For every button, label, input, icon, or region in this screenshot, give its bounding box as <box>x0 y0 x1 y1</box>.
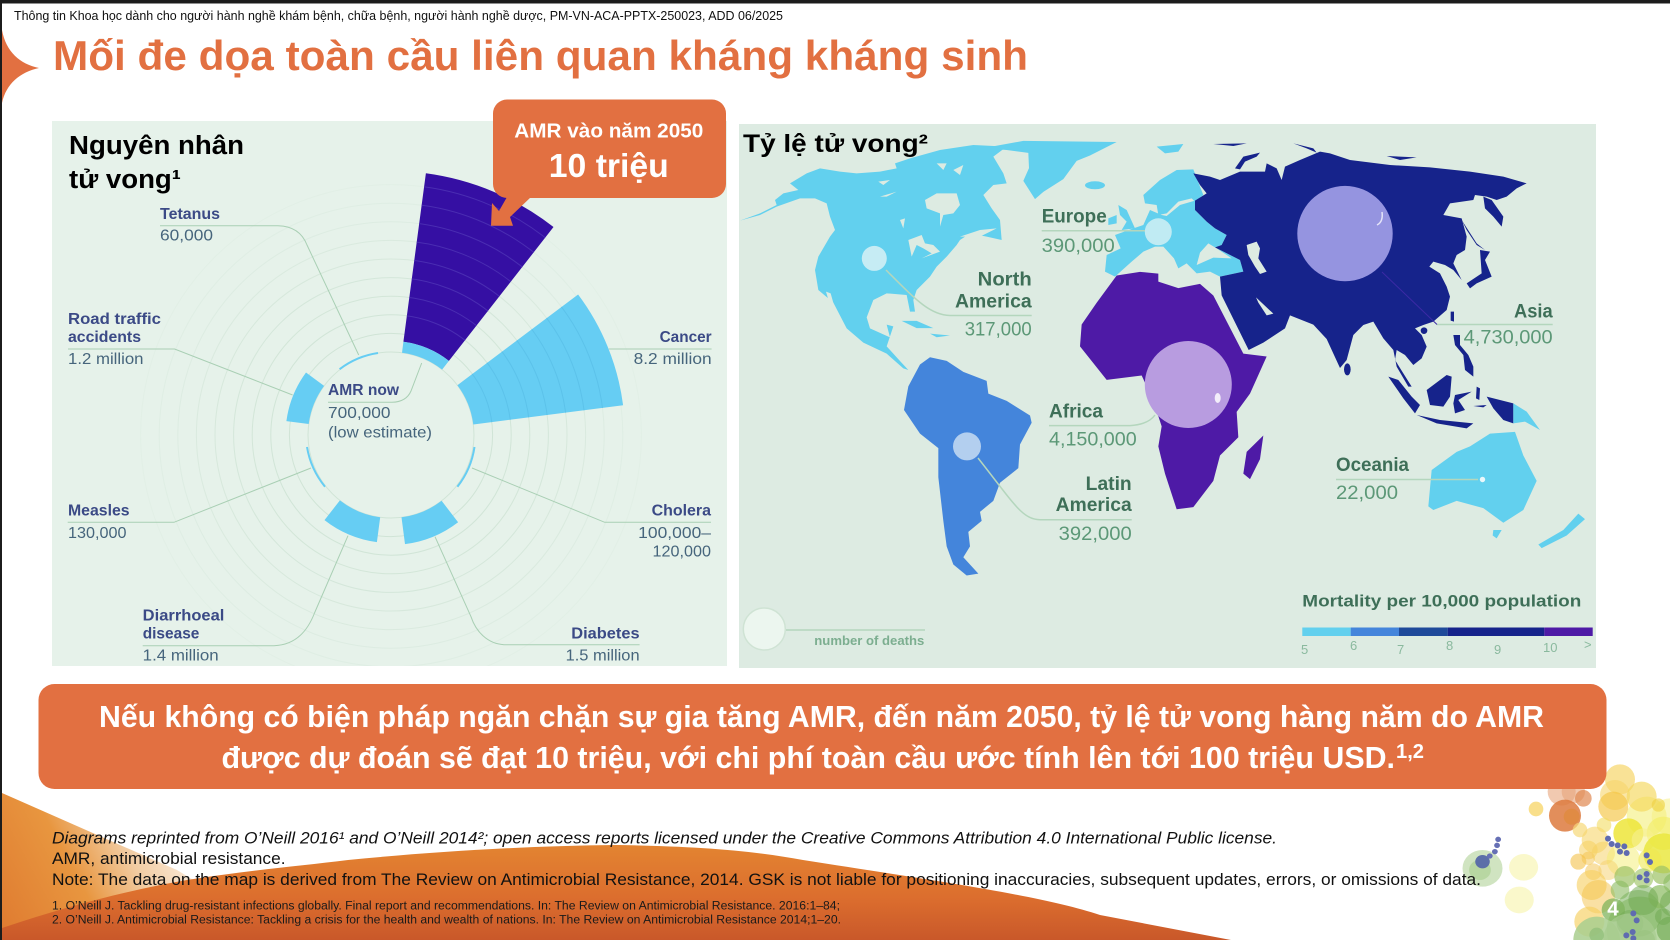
label: Road traffic accidents: 1.2 million <box>68 351 144 368</box>
label: Diarrhoeal disease: Diarrhoeal <box>143 608 224 625</box>
rings over cancer sector <box>472 306 603 422</box>
label: AMR now: AMR now <box>328 382 400 399</box>
sector: AMR now <box>402 342 449 370</box>
label: Europe <box>1042 207 1115 257</box>
label: Asia: 4,730,000 <box>1464 328 1553 348</box>
label: Cancer <box>634 329 712 368</box>
footnotes <box>52 829 1481 889</box>
legend: mortality scale: 9 <box>1494 642 1501 657</box>
panel: world mortality map <box>739 124 1596 668</box>
icon: title arrow <box>2 30 39 103</box>
panel: causes of death <box>52 121 727 685</box>
label: Road traffic accidents: Road traffic <box>68 311 161 328</box>
sector: AMR 2050 <box>403 173 554 361</box>
label: Africa: Africa <box>1049 401 1103 422</box>
legend: mortality scale: 10 <box>1543 640 1557 655</box>
leader lines <box>786 231 1553 630</box>
label: Cholera: Cholera <box>652 503 711 520</box>
label: Asia: Asia <box>1514 301 1553 322</box>
label: Cholera <box>638 503 711 561</box>
title: Mối đe dọa toàn cầu liên quan kháng kháng sinh <box>53 32 1028 79</box>
header note: Thông tin Khoa học dành cho người hành nghề khám bệnh, chữa bệnh, người hành nghề dược, PM-VN-ACA-PPTX-250023, ADD 06/2025 <box>14 9 783 23</box>
banner: key message: 1,2 <box>1396 741 1424 763</box>
legend: mortality scale: 8 <box>1446 638 1453 653</box>
callout: AMR in 2050: 10 triệu <box>549 147 669 184</box>
legend: mortality scale: > <box>1584 637 1592 652</box>
footnotes: Note: The data on the map is derived from The Review on Antimicrobial Resistance, 2014. GSK is not liable for positioning inaccuracies, subsequent updates, errors, or omissions of data. <box>52 871 1481 889</box>
legend: mortality scale: 6 <box>1350 638 1357 653</box>
heading: causes: tử vong¹ <box>69 166 181 194</box>
label: Latin America: 392,000 <box>1059 524 1132 545</box>
banner: key message <box>38 684 1606 789</box>
sector: cancer <box>457 294 623 424</box>
decorative bubbles: left group <box>1463 837 1538 913</box>
label: North America <box>955 270 1032 340</box>
banner: key message: được dự đoán sẽ đạt 10 triệu, với chi phí toàn cầu ước tính lên tới 100 triệu USD. <box>222 740 1395 775</box>
sector: cholera <box>457 447 474 487</box>
sector: road traffic <box>286 372 324 424</box>
references <box>52 900 841 926</box>
legend: number of deaths <box>743 608 924 650</box>
decorative bubbles: right cluster <box>1529 764 1670 940</box>
bubble: Europe <box>1145 218 1172 245</box>
label: North America: 317,000 <box>965 320 1032 340</box>
footnotes: AMR, antimicrobial resistance. <box>52 850 286 868</box>
label: Measles <box>68 503 130 542</box>
label: Latin America: Latin <box>1086 474 1132 495</box>
map: Latin America, Greenland and Africa <box>902 141 1267 575</box>
references: 1. O’Neill J. Tackling drug-resistant infections globally. Final report and recommendations. In: The Review on Antimicrobial Resistance. 2016:1–84; <box>52 900 840 912</box>
bubble: Oceania <box>1480 477 1485 482</box>
label: Cancer: Cancer <box>660 329 712 346</box>
references: 2. O’Neill J. Antimicrobial Resistance: Tackling a crisis for the health and wealth of nations. In: The Review on Antimicrobial Resistance 2014;1–20. <box>52 914 841 926</box>
sector: diabetes <box>402 501 458 544</box>
label: AMR now: 700,000 <box>328 405 391 422</box>
label: Diarrhoeal disease <box>143 608 224 665</box>
bubble: North America <box>862 246 887 271</box>
label: AMR now <box>328 382 432 442</box>
banner: key message: Nếu không có biện pháp ngăn chặn sự gia tăng AMR, đến năm 2050, tỷ lệ tử vong hàng năm do AMR <box>99 699 1544 734</box>
rings over AMR 2050 sector <box>406 186 546 341</box>
label: Cholera: 100,000– <box>638 525 711 542</box>
label: Road traffic accidents <box>68 311 161 368</box>
label: Diabetes: Diabetes <box>571 626 640 643</box>
heading: causes: Nguyên nhân <box>69 132 244 160</box>
label: AMR now: (low estimate) <box>328 424 432 442</box>
label: Diarrhoeal disease: 1.4 million <box>143 648 219 665</box>
label: North America: America <box>955 292 1032 312</box>
legend: mortality scale: 5 <box>1301 642 1308 657</box>
heading: causes <box>69 132 244 194</box>
callout: AMR in 2050: AMR vào năm 2050 <box>514 119 703 142</box>
label: Europe: 390,000 <box>1042 236 1115 257</box>
map: Europe and Asia <box>1105 143 1527 387</box>
page number: 4 <box>1607 898 1619 921</box>
legend: mortality scale <box>1301 591 1593 657</box>
footnotes: Diagrams reprinted from O’Neill 2016¹ and O’Neill 2014²; open access reports licensed under the Creative Commons Attribution 4.0 International Public license. <box>52 829 1277 847</box>
label: Latin America <box>1056 474 1132 545</box>
label: Road traffic accidents: accidents <box>68 329 141 346</box>
label: Europe: Europe <box>1042 207 1107 228</box>
legend: mortality scale: Mortality per 10,000 population <box>1302 591 1581 610</box>
heading: mortality: Tỷ lệ tử vong² <box>743 130 928 158</box>
map: Southeast Asia islands <box>1344 312 1540 430</box>
label: Diabetes <box>566 626 640 665</box>
label: Africa: 4,150,000 <box>1049 429 1137 450</box>
label: Diabetes: 1.5 million <box>566 648 640 665</box>
bubble: Asia <box>1297 186 1393 281</box>
label: Oceania: 22,000 <box>1336 483 1398 504</box>
label: Tetanus: 60,000 <box>160 228 213 245</box>
footer wave <box>2 845 1231 940</box>
label: Diarrhoeal disease: disease <box>143 626 199 643</box>
label: Cholera: 120,000 <box>652 544 711 561</box>
label: Cancer: 8.2 million <box>634 351 712 368</box>
bubble: Africa <box>1145 341 1232 428</box>
label: Measles: Measles <box>68 503 130 520</box>
legend: mortality scale: 7 <box>1397 642 1404 657</box>
label: Oceania <box>1336 455 1409 504</box>
label: Tetanus: Tetanus <box>160 206 220 223</box>
legend: number of deaths: number of deaths <box>814 633 924 648</box>
footer triangle <box>2 793 210 940</box>
map: Oceania <box>1428 432 1585 548</box>
label: Latin America: America <box>1056 495 1132 516</box>
label: North America: North <box>978 270 1032 291</box>
label: Tetanus <box>160 206 220 245</box>
sector: measles <box>307 447 325 487</box>
sector: diarrhoeal disease <box>324 500 380 542</box>
map: North America <box>740 145 1007 370</box>
bubble: Latin America <box>953 432 981 460</box>
label: Oceania: Oceania <box>1336 455 1409 476</box>
label: Asia <box>1464 301 1553 348</box>
sector: tetanus <box>340 353 378 369</box>
callout: AMR in 2050 <box>491 100 726 226</box>
label: Africa <box>1049 401 1137 450</box>
label: Measles: 130,000 <box>68 525 127 542</box>
leader lines <box>68 226 712 646</box>
